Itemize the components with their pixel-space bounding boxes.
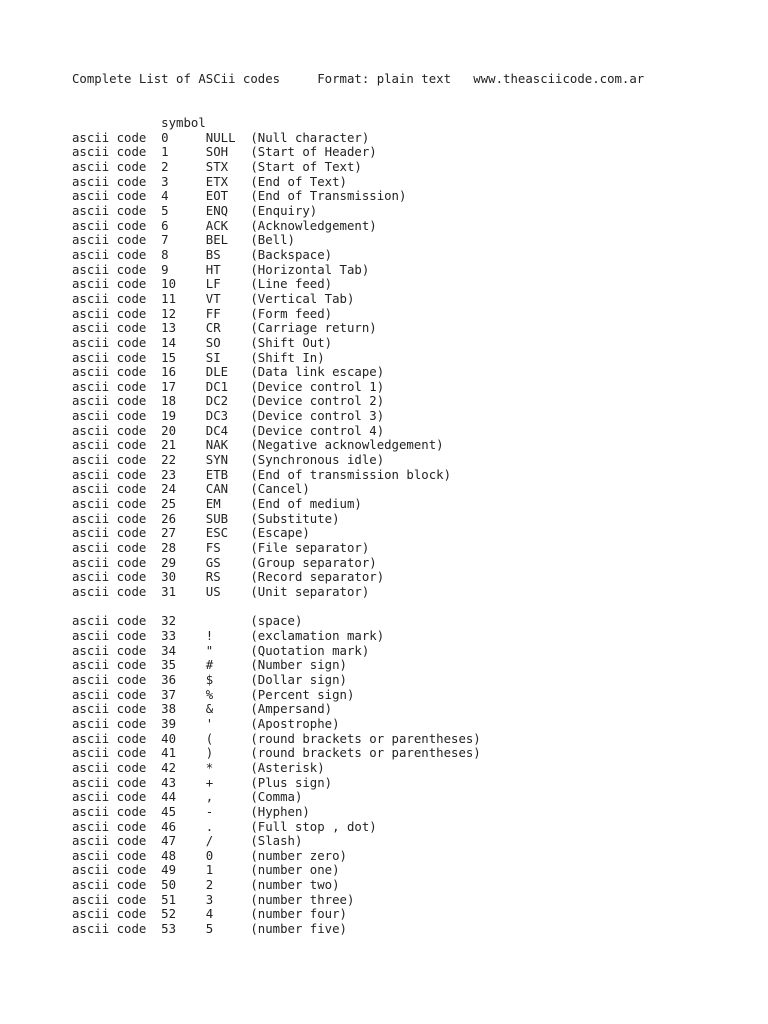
title: Complete List of ASCii codes Format: plain text www.theasciicode.com.ar — [72, 72, 644, 86]
table of ascii codes: symbol ascii code 0 NULL (Null character) ascii code 1 SOH (Start of Header) ascii code 2 STX (Start of Text) ascii code 3 ETX (End of Text) ascii code 4 EOT (End of Transmission) ascii code 5 ENQ (Enquiry) ascii code 6 ACK (Acknowledgement) ascii code 7 BEL (Bell) ascii code 8 BS (Backspace) ascii code 9 HT (Horizontal Tab) ascii code 10 LF (Line feed) ascii code 11 VT (Vertical Tab) ascii code 12 FF (Form feed) ascii code 13 CR (Carriage return) ascii code 14 SO (Shift Out) ascii code 15 SI (Shift In) ascii code 16 DLE (Data link escape) ascii code 17 DC1 (Device control 1) ascii code 18 DC2 (Device control 2) ascii code 19 DC3 (Device control 3) ascii code 20 DC4 (Device control 4) ascii code 21 NAK (Negative acknowledgement) ascii code 22 SYN (Synchronous idle) ascii code 23 ETB (End of transmission block) ascii code 24 CAN (Cancel) ascii code 25 EM (End of medium) ascii code 26 SUB (Substitute) ascii code 27 ESC (Escape) ascii code 28 FS (File separator) ascii code 29 GS (Group separator) ascii code 30 RS (Record separator) ascii code 31 US (Unit separator) ascii code 32 (space) ascii code 33 ! (exclamation mark) ascii code 34 " (Quotation mark) ascii code 35 # (Number sign) ascii code 36 $ (Dollar sign) ascii code 37 % (Percent sign) ascii code 38 & (Ampersand) ascii code 39 ' (Apostrophe) ascii code 40 ( (round brackets or parentheses) ascii code 41 ) (round brackets or parentheses) ascii code 42 * (Asterisk) ascii code 43 + (Plus sign) ascii code 44 , (Comma) ascii code 45 - (Hyphen) ascii code 46 . (Full stop , dot) ascii code 47 / (Slash) ascii code 48 0 (number zero) ascii code 49 1 (number one) ascii code 50 2 (number two) ascii code 51 3 (number three) ascii code 52 4 (number four) ascii code 53 5 (number five) — [72, 116, 481, 936]
